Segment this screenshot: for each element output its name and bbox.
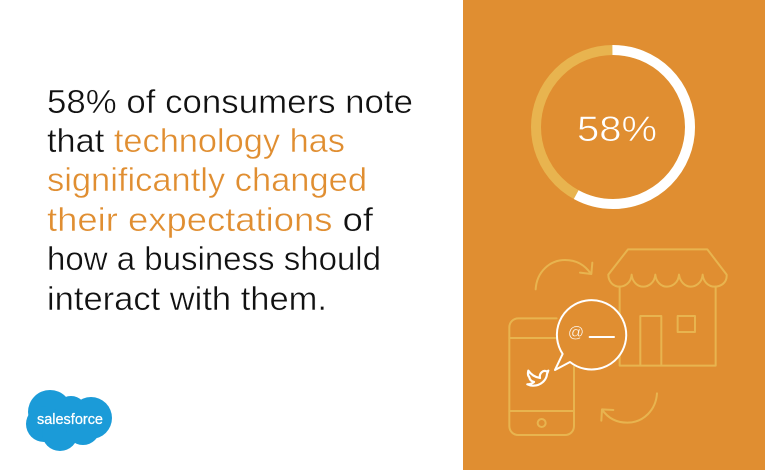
headline text: how a business should	[47, 240, 381, 277]
icon: store	[608, 249, 727, 366]
headline text: their expectations of	[47, 201, 374, 238]
headline text: significantly changed	[47, 161, 367, 198]
arrow: top curved	[536, 260, 592, 289]
icon: speech bubble	[555, 300, 626, 370]
at sign and input line	[568, 324, 614, 341]
logo wordmark: salesforce	[37, 411, 103, 428]
logo: salesforce	[26, 390, 112, 451]
headline text: interact with them.	[47, 280, 327, 317]
donut chart: 58%: 58%	[577, 110, 657, 149]
icon: twitter bird	[527, 371, 548, 386]
logo cloud	[26, 390, 112, 451]
arrow: bottom curved	[601, 393, 657, 423]
panel: orange background	[463, 0, 765, 470]
donut chart: 58%	[536, 50, 690, 204]
headline text: 58% of consumers note	[47, 83, 413, 120]
headline text: that technology has	[47, 122, 345, 159]
icon: phone and store illustration	[509, 249, 727, 435]
icon: phone	[509, 318, 574, 435]
at sign and input line: @	[568, 324, 584, 341]
headline text	[47, 83, 413, 317]
